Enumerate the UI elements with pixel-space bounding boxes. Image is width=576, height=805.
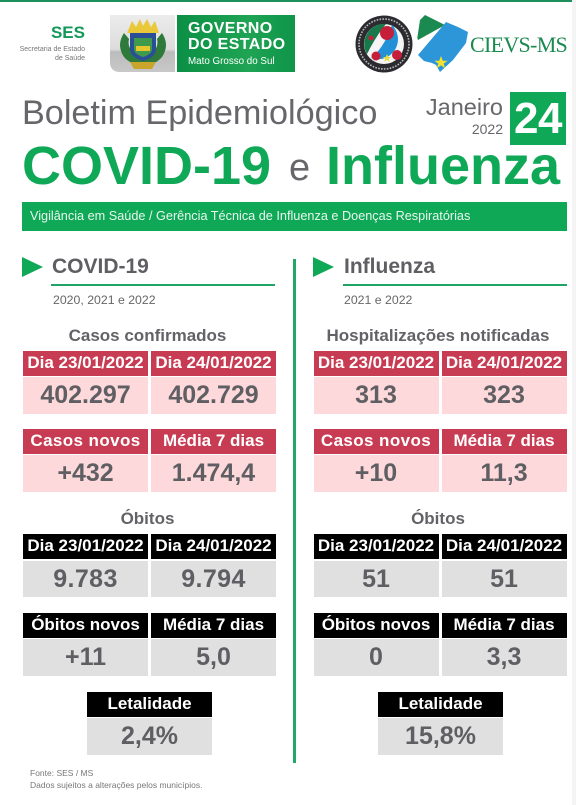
- cell: deaths day 23: 51: [362, 564, 390, 592]
- cell: lethality header: Letalidade: [398, 694, 483, 713]
- cell: day 23 header: Dia 23/01/2022: [27, 353, 144, 372]
- cell: deaths day 24 header: Dia 24/01/2022: [155, 536, 272, 555]
- cell: lethality header: [378, 692, 503, 716]
- cell: new cases: [23, 455, 148, 492]
- heading rule: [343, 284, 567, 286]
- date badge: 24: 24: [514, 94, 562, 143]
- logo: state coat of arms: [110, 15, 175, 72]
- cell: deaths day 24 header: Dia 24/01/2022: [446, 536, 562, 555]
- heading: Influenza: Influenza: [344, 255, 435, 278]
- date: Janeiro 2022: Janeiro: [426, 94, 503, 120]
- cell: new deaths: 0: [369, 643, 383, 671]
- cell: lethality header: [87, 692, 212, 716]
- cell: deaths day 23: [23, 560, 148, 597]
- logo: Governo do Estado: GOVERNO: [188, 20, 273, 37]
- cell: new cases: +10: [355, 459, 397, 487]
- logo: Governo do Estado: Mato Grosso do Sul: [188, 56, 275, 67]
- source note: Dados sujeitos a alterações pelos municípios.: [30, 780, 202, 790]
- cell: 7 day mean header: Média 7 dias: [163, 431, 264, 450]
- cell: day 24 header: Dia 24/01/2022: [446, 353, 562, 372]
- cell: deaths mean header: Média 7 dias: [453, 615, 555, 634]
- heading: hospitalizations: Hospitalizações notificadas: [327, 326, 549, 345]
- logo: CIEVS-MS wordmark: CIEVS-MS: [470, 32, 567, 57]
- cell: lethality: [378, 718, 503, 754]
- heading: deaths: Óbitos: [121, 509, 174, 528]
- source note: [30, 768, 202, 790]
- cell: day 23 hospitalizations: [314, 377, 438, 414]
- main title: COVID-19 e Influenza: Influenza: [326, 136, 560, 196]
- cell: day 23 cases: [23, 377, 148, 414]
- title: Boletim Epidemiológico: Boletim Epidemiológico: [22, 94, 377, 132]
- cell: day 24 cases: 402.729: [168, 381, 259, 409]
- date: Janeiro 2022: 2022: [472, 121, 503, 137]
- cell: 7 day mean header: [151, 429, 276, 454]
- cell: 7 day mean: [442, 455, 566, 492]
- cell: new cases: +432: [57, 459, 114, 487]
- cell: deaths mean: [151, 639, 276, 676]
- cell: deaths mean: 5,0: [196, 643, 231, 671]
- subtitle bar: Vigilância em Saúde / Gerência Técnica de Influenza e Doenças Respiratórias: [30, 209, 470, 223]
- cell: day 23 header: Dia 23/01/2022: [318, 353, 434, 372]
- main title: COVID-19 e Influenza: [22, 136, 560, 196]
- cell: new cases header: Casos novos: [30, 431, 141, 450]
- cell: day 23 cases: 402.297: [40, 381, 131, 409]
- column divider: [293, 259, 296, 763]
- logo: SES: Secretaria de Estado: [20, 46, 85, 53]
- source note: Fonte: SES / MS: [30, 768, 93, 778]
- cell: lethality: 15,8%: [405, 722, 476, 750]
- cell: lethality: [87, 718, 212, 754]
- cell: deaths day 23: 9.783: [53, 564, 118, 592]
- cell: new cases header: [314, 429, 438, 454]
- cell: deaths mean header: [151, 613, 276, 638]
- cell: new deaths header: [23, 613, 148, 638]
- logo: Mato Grosso do Sul map: [417, 15, 468, 72]
- icon: COVID-19 arrow: [22, 257, 43, 277]
- logo: round virus seal: [356, 16, 412, 72]
- cell: lethality: 2,4%: [121, 722, 178, 750]
- heading: deaths: Óbitos: [411, 509, 465, 528]
- cell: deaths day 23 header: Dia 23/01/2022: [318, 536, 434, 555]
- cell: deaths mean header: [442, 613, 566, 638]
- cell: new deaths header: Óbitos novos: [31, 615, 140, 634]
- panel: Influenza: [313, 255, 567, 755]
- cell: lethality header: Letalidade: [107, 694, 192, 713]
- cell: deaths day 23 header: Dia 23/01/2022: [27, 536, 144, 555]
- cell: 7 day mean: [151, 455, 276, 492]
- cell: day 24 header: Dia 24/01/2022: [155, 353, 272, 372]
- logo: SES: de Saúde: [55, 55, 85, 62]
- main title: COVID-19 e Influenza: e: [289, 147, 310, 189]
- cell: day 24 hospitalizations: 323: [483, 381, 525, 409]
- cell: 7 day mean header: [442, 429, 566, 454]
- cell: deaths day 24: 9.794: [181, 564, 246, 592]
- cell: new deaths: [23, 639, 148, 676]
- subtitle bar: [22, 202, 567, 231]
- cell: deaths mean: 3,3: [487, 643, 521, 671]
- cell: deaths day 24: [442, 560, 566, 597]
- heading: COVID-19: COVID-19: [52, 255, 149, 278]
- cell: new cases: [314, 455, 438, 492]
- logo: Governo do Estado: DO ESTADO: [188, 36, 286, 53]
- cell: new deaths: [314, 639, 438, 676]
- cell: day 24 cases: [151, 377, 276, 414]
- date: Janeiro 2022: [426, 94, 503, 137]
- logo: Governo do Estado: [177, 15, 295, 72]
- cell: deaths day 24: [151, 560, 276, 597]
- cell: new deaths: +11: [65, 643, 106, 671]
- text: years: 2021 e 2022: [344, 293, 412, 307]
- logo: SES: SES: [51, 23, 85, 42]
- heading rule: [51, 284, 275, 286]
- cell: new cases header: Casos novos: [321, 431, 431, 450]
- cell: 7 day mean header: Média 7 dias: [453, 431, 555, 450]
- cell: deaths mean: [442, 639, 566, 676]
- cell: 7 day mean: 11,3: [480, 459, 528, 487]
- cell: deaths day 24: 51: [490, 564, 518, 592]
- text: years: 2020, 2021 e 2022: [53, 293, 156, 307]
- icon: Influenza arrow: [313, 257, 334, 277]
- cell: day 24 hospitalizations: [442, 377, 566, 414]
- cell: deaths day 23: [314, 560, 438, 597]
- heading: casos confirmados: Casos confirmados: [69, 326, 226, 345]
- cell: new cases header: [23, 429, 148, 454]
- cell: day 23 hospitalizations: 313: [355, 381, 397, 409]
- panel: COVID-19: [22, 255, 276, 790]
- main title: COVID-19 e Influenza: COVID-19: [22, 136, 271, 196]
- cell: new deaths header: [314, 613, 438, 638]
- cell: deaths mean header: Média 7 dias: [163, 615, 264, 634]
- logo: SES: [20, 23, 85, 62]
- cell: new deaths header: Óbitos novos: [322, 615, 430, 634]
- cell: 7 day mean: 1.474,4: [172, 459, 255, 487]
